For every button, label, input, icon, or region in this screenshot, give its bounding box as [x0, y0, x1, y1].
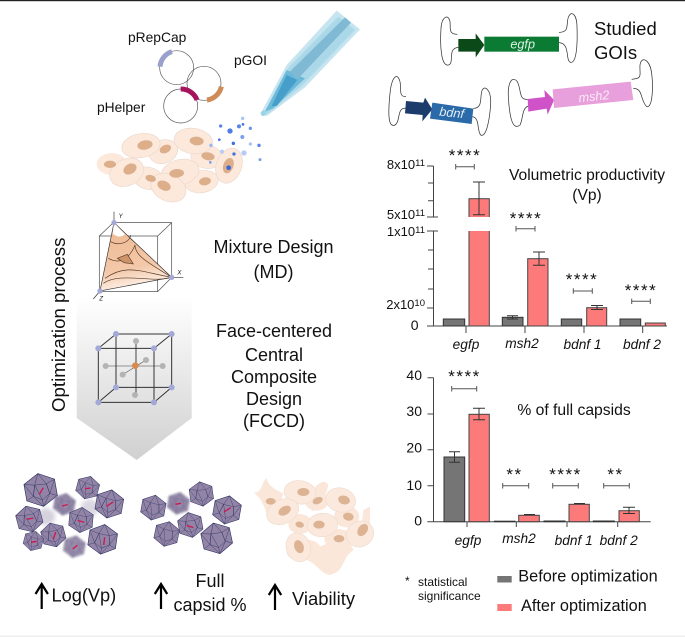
gene: msh2: [508, 60, 652, 126]
x axis labels: [453, 336, 661, 352]
chart title: (Vp): [572, 187, 602, 204]
y axis labels: 0: [411, 317, 419, 333]
legend: After optimization: [521, 597, 647, 615]
y axis labels: 1x10: [387, 224, 415, 239]
label: pGOI: pGOI: [234, 53, 267, 68]
outcome: full capsid %: [155, 571, 247, 615]
y axis labels: [406, 367, 422, 528]
statistical significance note: statistical: [418, 575, 467, 589]
x axis labels: bdnf 2: [600, 533, 638, 548]
chart title: Volumetric productivity: [509, 167, 665, 184]
y axis labels: 10: [414, 298, 425, 309]
studied GOI constructs: [389, 14, 652, 135]
chart: percent of full capsids: [406, 367, 651, 548]
mixture design icon: [93, 212, 183, 303]
axis break: [466, 217, 492, 231]
y axis labels: 11: [415, 225, 425, 236]
heading: Studied GOIs: GOIs: [594, 42, 637, 63]
label: pHelper: pHelper: [97, 100, 146, 115]
y axis labels: 2x10: [386, 297, 414, 312]
label: face-centered central composite design: Composite: [231, 367, 317, 387]
significance stars: [448, 367, 624, 484]
significance stars: [449, 146, 657, 300]
y axis labels: 40: [406, 367, 422, 383]
x axis labels: egfp: [453, 337, 480, 352]
chart title: % of full capsids: [517, 402, 631, 419]
axes: [427, 166, 667, 333]
significance stars: ****: [625, 281, 657, 300]
legend: [497, 568, 658, 615]
bars after: [469, 414, 639, 522]
label: face-centered central composite design: (FCCD): [243, 411, 305, 431]
bars before: [443, 317, 641, 326]
significance stars: ****: [549, 465, 582, 484]
heading: Studied GOIs: Studied: [594, 18, 657, 39]
top border: [0, 0, 685, 1]
label: face-centered central composite design: Face-centered: [216, 321, 332, 341]
gene: egfp: egfp: [510, 37, 535, 51]
transfection scene: [97, 11, 360, 207]
capsids: Log(Vp): [14, 471, 125, 559]
label: mixture design: (MD): [254, 262, 293, 282]
significance stars: **: [506, 465, 523, 484]
outcome: viability: Viability: [292, 588, 356, 609]
label: face-centered central composite design: Design: [246, 389, 302, 409]
x axis labels: [455, 531, 638, 548]
bars before: [444, 457, 614, 522]
FCCD cube icon: [95, 331, 175, 405]
bottom border: [0, 636, 685, 637]
label: face-centered central composite design: Central: [245, 345, 303, 365]
significance stars: ****: [566, 270, 598, 289]
bars after: [469, 199, 665, 326]
y axis labels: 11: [415, 208, 425, 219]
label: optimization process: Optimization process: [48, 238, 69, 412]
label: face-centered central composite design: [216, 321, 332, 431]
x axis labels: msh2: [502, 531, 536, 546]
y axis labels: 5x10: [387, 207, 415, 222]
gene: egfp: [441, 14, 577, 65]
gene: msh2: msh2: [578, 88, 610, 105]
statistical significance note: [405, 574, 481, 603]
significance stars: **: [607, 465, 624, 484]
y axis labels: 30: [406, 403, 422, 419]
cells: [97, 126, 247, 207]
x axis labels: bdnf 1: [563, 337, 602, 352]
mixture design icon: Y: [119, 214, 124, 220]
pipette tip: [261, 11, 360, 116]
significance stars: ****: [448, 367, 481, 386]
x axis labels: bdnf 2: [623, 337, 661, 352]
label: mixture design: Mixture Design: [213, 237, 334, 257]
label: mixture design: [213, 237, 334, 282]
gene: bdnf: [389, 77, 491, 135]
mixture design icon: Z: [98, 297, 103, 303]
significance brackets: [456, 164, 650, 304]
y axis labels: 20: [406, 440, 422, 456]
y axis labels: 0: [414, 512, 422, 528]
significance stars: ****: [510, 209, 542, 228]
damaged cells: viability: [253, 478, 378, 575]
heading: Studied GOIs: [594, 18, 657, 63]
statistical significance note: *: [405, 574, 410, 588]
y axis labels: [386, 157, 425, 333]
capsids: full capsid %: [140, 480, 243, 557]
viral dots: [209, 117, 261, 170]
y axis labels: 8x10: [387, 157, 415, 172]
optimization funnel arrow: [77, 297, 192, 460]
y axis labels: 11: [415, 158, 425, 169]
y axis labels: 10: [406, 477, 422, 493]
plasmids: [160, 51, 221, 123]
error bars: [473, 182, 603, 319]
label: pRepCap: pRepCap: [128, 30, 187, 45]
outcome: full capsid %: capsid %: [173, 595, 247, 615]
legend: Before optimization: [518, 568, 658, 586]
significance stars: ****: [449, 146, 481, 165]
x axis labels: egfp: [455, 533, 482, 548]
x axis labels: msh2: [505, 336, 539, 351]
error bars: [449, 408, 635, 514]
gene: bdnf: bdnf: [439, 105, 466, 121]
x axis labels: bdnf 1: [555, 533, 593, 548]
outcome: full capsid %: Full: [195, 571, 225, 591]
outcome: viability: [269, 585, 356, 610]
chart title: [509, 167, 665, 204]
mixture design icon: X: [176, 271, 182, 277]
chart: volumetric productivity: [386, 146, 667, 352]
significance brackets: [452, 386, 629, 488]
outcome: Log(Vp): [36, 584, 116, 609]
statistical significance note: significance: [418, 589, 481, 603]
axes: [427, 378, 651, 527]
outcome: Log(Vp): Log(Vp): [52, 586, 116, 606]
